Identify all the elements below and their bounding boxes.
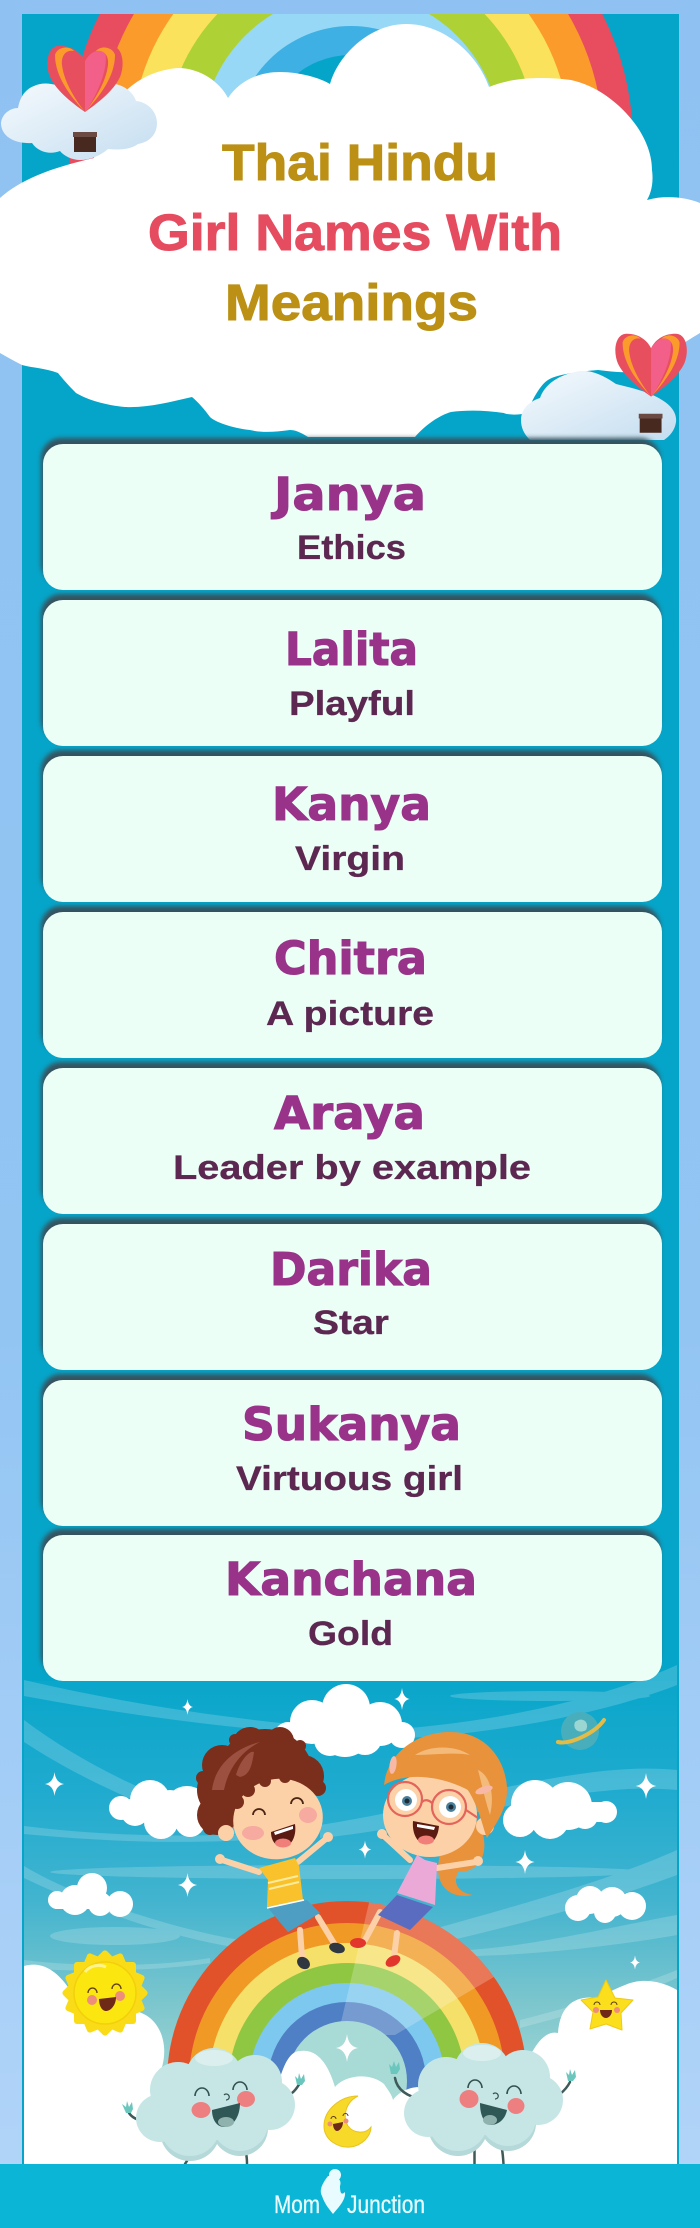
white cloud inside arch <box>281 2050 419 2104</box>
girl face <box>383 1773 477 1857</box>
girl <box>350 1732 507 1969</box>
card: Lalita: Playful <box>289 685 415 723</box>
header illustration <box>0 0 700 440</box>
card: Lalita <box>43 600 662 746</box>
rainbow <box>70 14 632 164</box>
planet <box>558 1712 604 1750</box>
card: Kanchana: Kanchana <box>225 1553 477 1606</box>
card: Darika: Star <box>313 1304 389 1342</box>
card: Sukanya: Sukanya <box>242 1398 461 1451</box>
girl fringe <box>384 1732 507 1838</box>
girl back hair <box>438 1820 484 1896</box>
card: Janya: Janya <box>271 468 426 521</box>
big white title cloud <box>0 24 700 437</box>
smiling cloud right <box>389 2043 576 2164</box>
card: Araya: Araya <box>274 1087 425 1140</box>
cloud lower right <box>565 1886 646 1923</box>
logo wordmark <box>274 2191 425 2219</box>
sun <box>61 1949 149 2037</box>
card: Kanya: Kanya <box>272 778 431 831</box>
balloon left <box>47 46 123 152</box>
boy <box>196 1727 346 1972</box>
boy hair <box>196 1727 326 1835</box>
card: Kanya: Virgin <box>295 840 405 878</box>
cloud top centre <box>274 1684 415 1757</box>
white ground clouds <box>24 1965 677 2164</box>
logo wordmark: Junction <box>347 2191 425 2219</box>
logo wordmark: Mom <box>274 2191 320 2219</box>
cloud right <box>503 1780 617 1839</box>
card: Darika: Darika <box>270 1243 432 1296</box>
title: Girl Names With <box>148 204 562 261</box>
smiling cloud left <box>122 2048 305 2164</box>
limbs left <box>129 2083 300 2164</box>
limbs right <box>395 2078 570 2164</box>
card: Chitra <box>43 912 662 1058</box>
logo: MomJunction <box>274 2169 425 2219</box>
star character <box>581 1980 633 2030</box>
cloud left <box>109 1780 209 1839</box>
title: Thai Hindu <box>222 134 498 191</box>
bottom illustration <box>24 1665 677 2164</box>
moon character <box>324 2096 371 2147</box>
sky streaks <box>24 1665 677 2028</box>
card shadows <box>41 438 660 1675</box>
card: Lalita: Lalita <box>285 623 418 676</box>
card: Janya: Ethics <box>297 529 406 567</box>
small cloud left <box>1 83 157 160</box>
card: Sukanya <box>43 1380 662 1526</box>
sky <box>24 1697 677 2068</box>
title: Meanings <box>225 274 478 331</box>
rainbow arch <box>168 1901 524 2090</box>
card: Kanchana: Gold <box>308 1615 393 1653</box>
card: Janya <box>43 444 662 590</box>
card: Kanya <box>43 756 662 902</box>
big sparkle <box>336 2034 358 2062</box>
card: Sukanya: Virtuous girl <box>236 1460 463 1498</box>
footer bar <box>0 2164 700 2228</box>
card: Araya <box>43 1068 662 1214</box>
card: Araya: Leader by example <box>173 1149 531 1187</box>
card: Chitra: A picture <box>266 995 434 1033</box>
logo icon <box>321 2169 345 2214</box>
card: Darika <box>43 1224 662 1370</box>
card: Kanchana <box>43 1535 662 1681</box>
small clouds <box>48 1684 646 1923</box>
girl eyes and glasses <box>395 1789 417 1811</box>
cloud lower left <box>48 1873 133 1917</box>
title <box>148 134 562 331</box>
card: Chitra: Chitra <box>274 932 427 985</box>
balloon right <box>615 334 687 433</box>
boy legs and shoes <box>222 1838 335 1957</box>
sparkles <box>45 1688 656 1970</box>
small cloud right <box>521 371 676 440</box>
